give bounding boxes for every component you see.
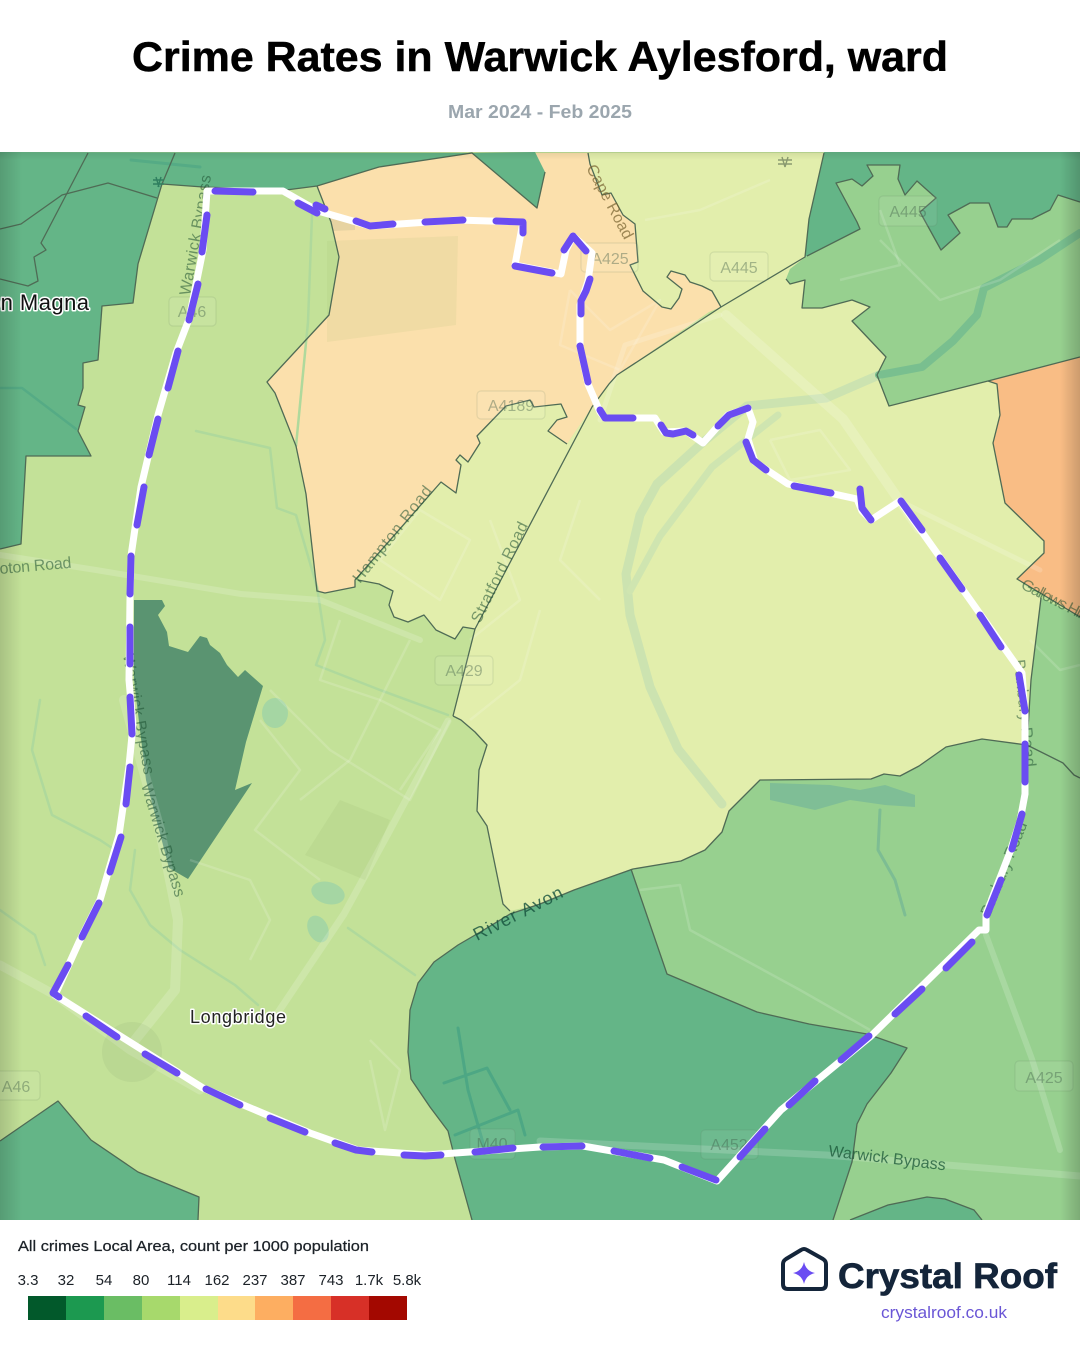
logo: Crystal Roof — [783, 1249, 1057, 1322]
panel: choropleth map — [0, 152, 1080, 1220]
area: south-west teal — [0, 1101, 199, 1220]
legend title: All crimes Local Area, count per 1000 population — [18, 1238, 369, 1255]
roads network — [0, 180, 1080, 1176]
legend scale values: 114 — [167, 1272, 191, 1289]
area: base light green wards — [0, 152, 1080, 1220]
road shields: A445 — [889, 204, 927, 221]
legend scale values: 3.3 — [18, 1272, 38, 1289]
road and river labels: Warwick Bypass — [119, 653, 157, 776]
water: rivers, streams and lakes — [0, 160, 1080, 1150]
area: south small teal — [850, 1197, 982, 1220]
road and river labels: Hampton Road — [350, 483, 436, 586]
legend scale values: 387 — [280, 1272, 306, 1289]
road and river labels: Cape Road — [582, 162, 636, 242]
road and river labels: Warwick Bypass — [177, 174, 215, 297]
road shields: A452 — [710, 1137, 748, 1154]
ward outline route — [53, 191, 1025, 1181]
route: white base line — [55, 191, 1025, 1181]
road shields: M40 — [476, 1136, 508, 1153]
legend — [18, 1238, 422, 1320]
road and river labels: oton Road — [0, 555, 72, 578]
road and river labels: Banbury Road — [978, 819, 1031, 918]
road shields: A425 — [591, 251, 629, 268]
legend scale values: 5.8k — [393, 1272, 422, 1289]
area: north-east mid green — [786, 165, 1080, 406]
icon: house with star — [783, 1249, 826, 1289]
area: teal wedge — [472, 152, 545, 208]
area: south-east mid green — [631, 739, 1080, 1220]
road and river labels: Warwick Bypass — [137, 781, 188, 899]
area: south centre teal — [408, 869, 907, 1220]
area: darkest ward — [134, 600, 263, 879]
area: pale Hampton ward — [358, 400, 592, 639]
road shields: A4189 — [488, 398, 534, 415]
road and river labels: Stratford Road — [468, 519, 532, 626]
place label: Longbridge: Longbridge — [190, 1007, 286, 1027]
website url: crystalroof.co.uk — [881, 1304, 1008, 1322]
logo wordmark: Crystal Roof — [838, 1257, 1057, 1296]
legend scale values: 162 — [204, 1272, 230, 1289]
area: east strip mid green — [1027, 598, 1080, 778]
ward boundaries — [0, 153, 1080, 1220]
subtitle: date range: Mar 2024 - Feb 2025 — [448, 101, 632, 122]
legend scale values — [18, 1272, 422, 1289]
area: cream north ward — [267, 153, 721, 593]
road shields: A429 — [445, 663, 483, 680]
route: purple dashes — [53, 191, 1025, 1180]
road shields: A46 — [178, 304, 206, 321]
icon: railway station, north — [778, 157, 792, 167]
road shields — [0, 196, 1073, 1159]
road and river labels: Warwick Bypass — [828, 1143, 947, 1174]
legend scale values: 32 — [58, 1272, 74, 1289]
icon: railway station, north-west — [153, 177, 164, 187]
road shields: A425 — [1025, 1070, 1063, 1087]
legend scale values: 237 — [242, 1272, 268, 1289]
title: Crime Rates in Warwick Aylesford, ward — [132, 33, 948, 80]
area: pale north ward — [588, 153, 824, 309]
legend scale values: 743 — [318, 1272, 344, 1289]
legend colour swatches — [28, 1296, 407, 1320]
legend scale values: 1.7k — [355, 1272, 384, 1289]
road and river labels: River Avon — [470, 882, 566, 945]
area: north-west teal — [0, 152, 472, 549]
area: pale main ward — [453, 269, 1044, 911]
legend scale values: 80 — [133, 1272, 149, 1289]
road shields: A445 — [720, 260, 758, 277]
area: east orange ward — [988, 357, 1080, 617]
legend scale values: 54 — [96, 1272, 112, 1289]
road and river labels — [0, 162, 1080, 1174]
area: north-east teal — [805, 152, 1080, 257]
road and river labels: Banbury Road — [1010, 659, 1038, 768]
road shields: A46 — [2, 1079, 30, 1096]
map edge shading — [0, 152, 1080, 1220]
